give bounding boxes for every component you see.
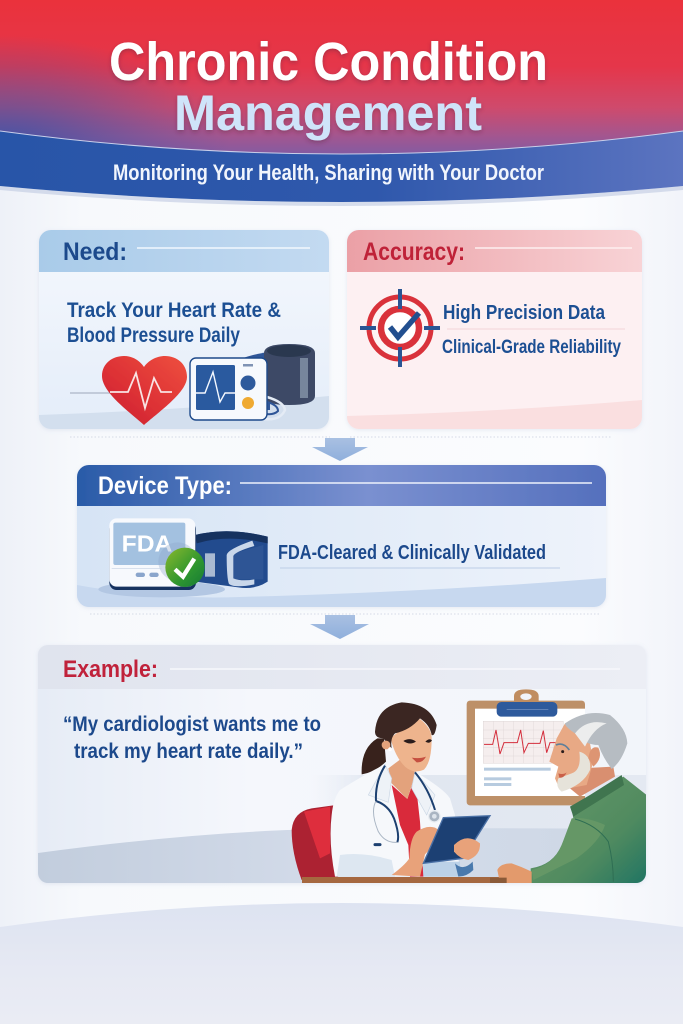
heading: device type: Device Type: (98, 472, 232, 500)
icon: target (360, 289, 440, 367)
illustration: doctor and patient (292, 689, 647, 885)
heading: need: Need: (63, 238, 127, 266)
icon: FDA monitor (109, 518, 197, 590)
quote: “My cardiologist wants me to (63, 713, 321, 736)
heading: example: Example: (63, 656, 158, 683)
need text (67, 299, 281, 347)
stethoscope (373, 766, 440, 845)
clipboard chart (467, 689, 585, 805)
icon: monitor (190, 358, 267, 420)
quote (63, 713, 321, 763)
doctor (331, 702, 490, 877)
icon: cuff band (195, 531, 268, 588)
need text: Track Your Heart Rate & (67, 299, 281, 322)
panel: example (38, 645, 647, 885)
need text: Blood Pressure Daily (67, 324, 240, 347)
icon: heart (102, 356, 187, 425)
icon: green check badge (165, 548, 205, 587)
subtitle: Monitoring Your Health, Sharing with Your Doctor (113, 160, 544, 185)
heading: accuracy: Accuracy: (363, 238, 465, 266)
arrow: device to example (310, 615, 369, 639)
title line 2: Management (174, 85, 482, 141)
panel: device type (77, 465, 606, 607)
icon: cuff (243, 344, 315, 419)
desk (302, 877, 507, 883)
hand (392, 827, 442, 877)
chair (292, 805, 338, 880)
accuracy text: Clinical-Grade Reliability (442, 337, 621, 358)
accuracy text (442, 302, 621, 358)
patient (490, 713, 647, 885)
accuracy text: High Precision Data (443, 302, 606, 324)
header banner (0, 0, 683, 206)
tablet (423, 816, 490, 863)
footer wave (0, 903, 683, 1024)
second hand (454, 838, 480, 860)
title line 1: Chronic Condition (109, 32, 548, 92)
icon: FDA monitor: FDA (122, 530, 172, 556)
dotted dividers (70, 437, 612, 614)
quote: track my heart rate daily.” (74, 740, 303, 763)
arrow: need to device (312, 438, 368, 461)
device text: FDA-Cleared & Clinically Validated (278, 542, 546, 564)
panel: need (39, 230, 329, 429)
icon: FDA device and cuff (98, 518, 268, 597)
panel: accuracy (347, 230, 642, 429)
